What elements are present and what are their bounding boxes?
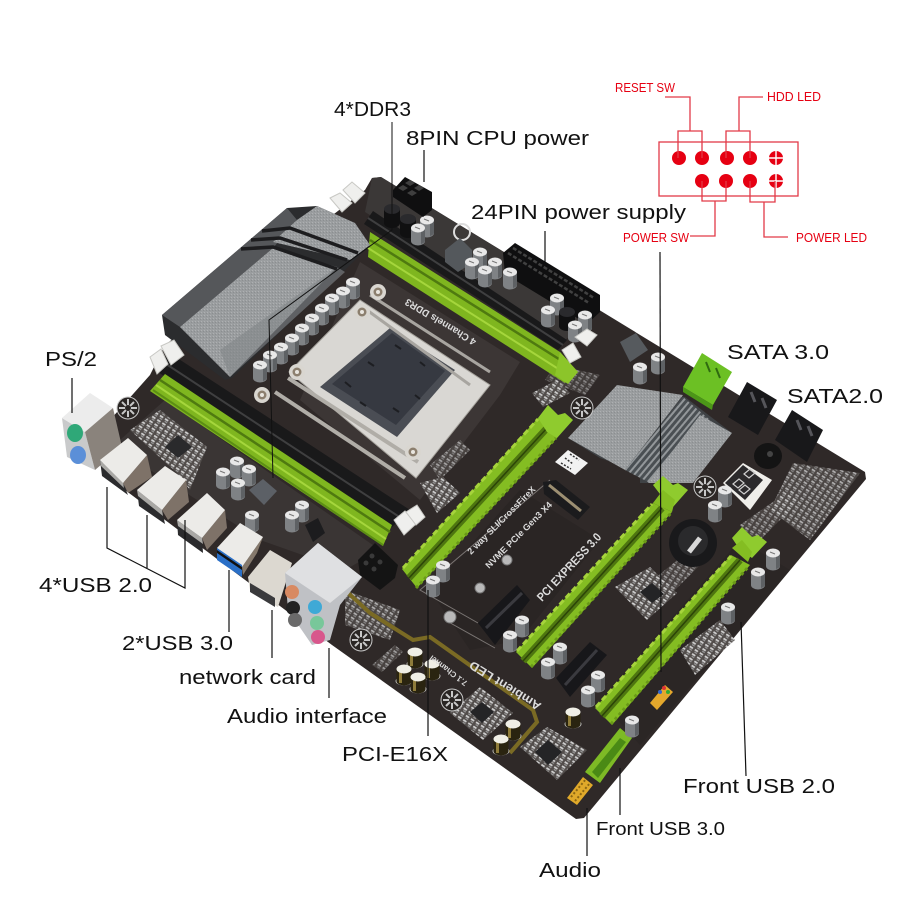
label: PS/2: PS/2 <box>45 349 97 371</box>
24-pin power connector <box>503 243 600 324</box>
audio jacks <box>285 543 362 645</box>
leader line: front USB 3.0 <box>619 768 621 815</box>
label: 24PIN power supply: 24PIN power supply <box>471 202 686 224</box>
leader line: front panel header <box>660 252 661 672</box>
leader line: 8PIN CPU power <box>423 150 425 182</box>
black SATA 2.0 connectors <box>728 382 823 462</box>
seven-segment debug display <box>723 463 772 510</box>
RESET SW label: RESET SW <box>615 81 675 95</box>
upper DDR3 slots <box>364 211 578 384</box>
POWER SW label: POWER SW <box>623 231 689 245</box>
board silkscreen text: 7.1 Channel <box>428 653 469 688</box>
label: network card: network card <box>179 667 316 689</box>
label: Audio interface: Audio interface <box>227 706 387 728</box>
label: SATA 3.0: SATA 3.0 <box>727 342 829 364</box>
QR code sticker <box>555 450 588 475</box>
silkscreen component patches <box>130 365 860 780</box>
label: SATA2.0: SATA2.0 <box>787 386 883 408</box>
PCIe x16 slot 1 <box>402 405 573 588</box>
audio yellow header <box>567 777 593 805</box>
board silkscreen text <box>403 295 604 713</box>
silver standoff screws <box>444 555 512 623</box>
leader line: PCI-E16X <box>427 590 429 736</box>
leader line: 4*DDR3 <box>269 122 392 478</box>
header outline <box>659 142 798 196</box>
leader line: PS/2 <box>71 378 73 413</box>
chipset heatsink <box>568 385 732 483</box>
PCIe x16 slot 2 <box>516 476 688 668</box>
board silkscreen text: Ambient LED <box>466 658 544 713</box>
label: Front USB 2.0: Front USB 2.0 <box>683 776 835 798</box>
board silkscreen text: PCI EXPRESS 3.0 <box>534 530 604 604</box>
board silkscreen text: NVME PCIe Gen3 X4 <box>483 500 554 570</box>
VRM capacitor row <box>253 278 360 382</box>
lower DDR3 slots <box>150 352 410 546</box>
green SATA 3.0 connector <box>683 353 732 410</box>
buzzer <box>754 443 782 469</box>
connector lines <box>665 97 788 237</box>
pins <box>672 151 783 188</box>
leader line: 2*USB 3.0 <box>228 570 230 632</box>
PS/2 ports <box>62 393 122 470</box>
CMOS battery holder <box>669 519 717 567</box>
ambient LED gold trace <box>347 592 537 753</box>
RAM slot white latches <box>150 182 597 535</box>
board silkscreen text: 2 way SLI/CrossFireX <box>465 484 537 556</box>
label: PCI-E16X: PCI-E16X <box>342 744 448 766</box>
board silkscreen text: 4 Channels DDR3 <box>403 295 479 347</box>
M.2 NVMe slot <box>543 480 590 520</box>
POWER LED label: POWER LED <box>796 231 867 245</box>
leader line: front USB 2.0 <box>741 622 746 776</box>
CPU socket <box>254 284 490 478</box>
pin crosses <box>769 151 783 188</box>
LAN port <box>248 550 292 607</box>
8-pin CPU power connector <box>393 177 432 217</box>
front USB 3.0 header <box>585 728 632 783</box>
motherboard PCB <box>110 177 866 819</box>
label: 2*USB 3.0: 2*USB 3.0 <box>122 633 233 655</box>
label: 4*USB 2.0: 4*USB 2.0 <box>39 575 152 597</box>
label: Front USB 3.0: Front USB 3.0 <box>596 819 725 839</box>
front panel pin diagram <box>615 81 867 245</box>
label: Audio: Audio <box>539 860 601 882</box>
label: 4*DDR3: 4*DDR3 <box>334 99 411 121</box>
gold audio capacitors <box>396 648 582 756</box>
leader line: 24PIN power supply <box>544 231 546 262</box>
HDD LED label: HDD LED <box>767 90 821 104</box>
USB 3.0 port <box>217 523 263 577</box>
leader line: audio header <box>586 808 588 856</box>
board chips and fan marks <box>117 397 716 765</box>
lower-board capacitors <box>216 456 780 738</box>
VRM heatsink <box>162 206 370 380</box>
USB 2.0 stacked ports <box>100 438 227 553</box>
PCIe x1 slots <box>478 585 607 697</box>
leader line: audio interface <box>328 648 330 698</box>
label: 8PIN CPU power: 8PIN CPU power <box>406 128 589 150</box>
colored front panel header <box>650 685 673 710</box>
PCIe x16 slot 3 <box>595 527 767 725</box>
leader line: network card <box>271 610 273 658</box>
upper-board capacitors and inductors <box>384 204 665 384</box>
6-pin connector <box>358 543 398 590</box>
leader lines: 4*USB 2.0 <box>107 487 185 588</box>
